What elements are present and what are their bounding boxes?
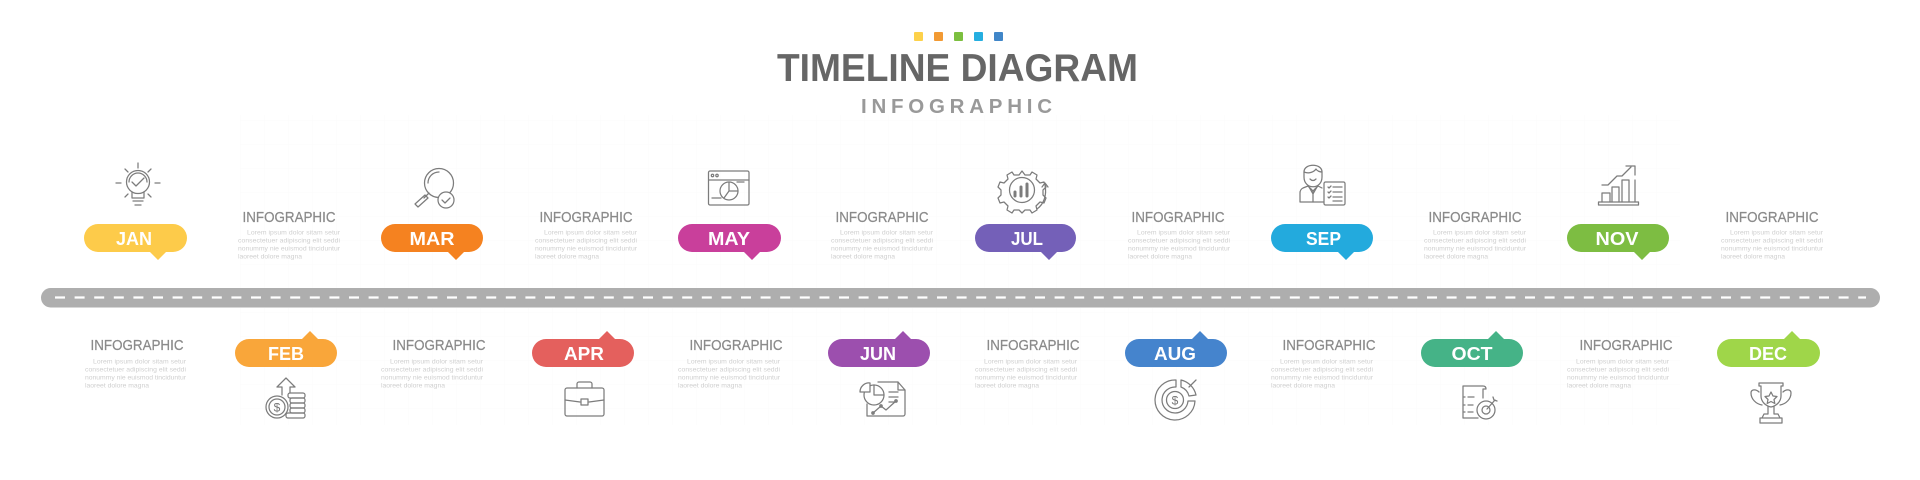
text block: Nov description: INFOGRAPHIC	[1726, 209, 1819, 226]
text block: Dec description: INFOGRAPHIC	[1580, 337, 1673, 354]
text block: Jul description: laoreet dolore magna	[1128, 254, 1192, 260]
SEP block	[1271, 165, 1527, 260]
text block: Oct description	[1271, 337, 1376, 390]
icon: businessman with checklist	[1300, 165, 1345, 205]
month pill: SEP	[1271, 224, 1373, 260]
month pill: OCT: OCT	[1452, 344, 1492, 364]
text block: Nov description: laoreet dolore magna	[1721, 254, 1785, 260]
JAN block	[84, 163, 341, 260]
text block: Dec description: nonummy nie euismod tinciduntur	[1567, 374, 1670, 382]
month pill: AUG: AUG	[1154, 344, 1196, 364]
text block: Mar description: nonummy nie euismod tinciduntur	[535, 246, 638, 252]
text block: Dec description: Lorem ipsum dolor sitam setur	[1576, 358, 1670, 366]
month pill: NOV: NOV	[1596, 229, 1638, 249]
MAY block	[678, 171, 934, 260]
text block: Sep description: Lorem ipsum dolor sitam setur	[1433, 230, 1527, 236]
text block: Mar description: consectetuer adipiscing elit seddi	[535, 238, 637, 244]
month pill: JUL: JUL	[1011, 229, 1043, 249]
month pill: MAR	[381, 224, 483, 260]
text block: Apr description	[381, 337, 486, 390]
text block: Oct description: INFOGRAPHIC	[1282, 337, 1376, 354]
text block: May description	[831, 209, 934, 260]
month pill: OCT	[1421, 331, 1523, 367]
text block: Oct description: consectetuer adipiscing elit seddi	[1271, 366, 1373, 374]
month pill: APR	[532, 331, 634, 367]
text block: Mar description: INFOGRAPHIC	[540, 209, 633, 226]
month pill: DEC: DEC	[1749, 344, 1787, 364]
text block: Aug description: consectetuer adipiscing elit seddi	[975, 366, 1077, 374]
month pill: MAY: MAY	[708, 229, 750, 249]
text block: May description: INFOGRAPHIC	[836, 209, 929, 226]
title: TIMELINE DIAGRAM	[777, 47, 1138, 90]
icon: trophy	[1751, 383, 1791, 423]
icon: rising bar chart	[1598, 166, 1638, 205]
text block: Oct description: Lorem ipsum dolor sitam setur	[1280, 358, 1374, 366]
month pill: FEB	[235, 331, 337, 367]
icon: light bulb	[116, 163, 160, 205]
text block: May description: consectetuer adipiscing elit seddi	[831, 238, 933, 244]
text block: Jun description: Lorem ipsum dolor sitam setur	[687, 358, 781, 366]
text block: Dec description: consectetuer adipiscing elit seddi	[1567, 366, 1669, 374]
FEB block	[85, 331, 337, 418]
month pill: AUG	[1125, 331, 1227, 367]
icon: gear with bars	[998, 171, 1048, 213]
colour dots	[914, 32, 1003, 41]
icon: browser with pie chart	[708, 171, 749, 205]
text block: Jan description: INFOGRAPHIC	[242, 209, 336, 226]
icon: dollar donut target	[1155, 380, 1196, 420]
month pill: APR: APR	[564, 344, 604, 364]
text block: Jul description	[1128, 209, 1231, 260]
text block: Sep description: consectetuer adipiscing elit seddi	[1424, 238, 1526, 244]
month pill: NOV	[1567, 224, 1669, 260]
month pill: FEB: FEB	[268, 344, 304, 364]
icon: coins with arrow: $	[274, 400, 281, 414]
text block: Nov description: consectetuer adipiscing elit seddi	[1721, 238, 1823, 244]
text block: Aug description	[975, 337, 1080, 390]
text block: Apr description: INFOGRAPHIC	[392, 337, 486, 354]
month pill: DEC	[1717, 331, 1820, 367]
month pill: JUN: JUN	[860, 344, 896, 364]
text block: Feb description: consectetuer adipiscing elit seddi	[85, 366, 186, 374]
text block: Jul description: consectetuer adipiscing elit seddi	[1128, 238, 1230, 244]
text block: Feb description: INFOGRAPHIC	[90, 337, 184, 354]
text block: Sep description: INFOGRAPHIC	[1428, 209, 1522, 226]
icon: checklist with target	[1463, 386, 1497, 419]
month pill: JAN: JAN	[116, 229, 152, 249]
icon: briefcase	[565, 382, 604, 416]
text block: Feb description	[85, 337, 187, 390]
subtitle: INFOGRAPHIC	[861, 95, 1052, 118]
text block: Jun description: INFOGRAPHIC	[690, 337, 783, 354]
text block: Jun description: nonummy nie euismod tinciduntur	[678, 374, 781, 382]
text block: Dec description: laoreet dolore magna	[1567, 382, 1631, 390]
text block: Nov description: nonummy nie euismod tinciduntur	[1721, 246, 1824, 252]
MAR block	[381, 168, 638, 260]
text block: Apr description: laoreet dolore magna	[381, 382, 445, 390]
text block: Jun description: laoreet dolore magna	[678, 382, 742, 390]
icon: report with pie chart	[860, 382, 905, 416]
text block: May description: laoreet dolore magna	[831, 254, 895, 260]
text block: Jan description	[238, 209, 341, 260]
month pill: MAR: MAR	[410, 229, 454, 249]
month pill: JAN	[84, 224, 187, 260]
text block: Mar description: laoreet dolore magna	[535, 254, 599, 260]
text block: Feb description: laoreet dolore magna	[85, 382, 149, 390]
text block: Jul description: INFOGRAPHIC	[1132, 209, 1225, 226]
month pill: SEP: SEP	[1306, 229, 1341, 249]
text block: Oct description: laoreet dolore magna	[1271, 382, 1335, 390]
APR block	[381, 331, 634, 416]
text block: Sep description	[1424, 209, 1527, 260]
text block: Nov description: Lorem ipsum dolor sitam setur	[1730, 230, 1824, 236]
text block: Apr description: nonummy nie euismod tinciduntur	[381, 374, 484, 382]
text block: May description: nonummy nie euismod tinciduntur	[831, 246, 934, 252]
text block: Dec description	[1567, 337, 1673, 390]
text block: Apr description: consectetuer adipiscing elit seddi	[381, 366, 483, 374]
text block: Jan description: laoreet dolore magna	[238, 254, 302, 260]
text block: Sep description: laoreet dolore magna	[1424, 254, 1488, 260]
month pill: JUL	[975, 224, 1076, 260]
AUG block	[975, 331, 1227, 420]
text block: Aug description: laoreet dolore magna	[975, 382, 1039, 390]
text block: May description: Lorem ipsum dolor sitam setur	[840, 230, 934, 236]
text block: Feb description: Lorem ipsum dolor sitam setur	[93, 358, 187, 366]
text block: Apr description: Lorem ipsum dolor sitam setur	[390, 358, 484, 366]
month pill: JUN	[828, 331, 930, 367]
timeline road	[41, 288, 1880, 308]
text block: Mar description	[535, 209, 638, 260]
icon: dollar donut target: $	[1172, 394, 1179, 408]
text block: Feb description: nonummy nie euismod tinciduntur	[85, 374, 187, 382]
text block: Sep description: nonummy nie euismod tinciduntur	[1424, 246, 1527, 252]
icon: magnifier with check	[415, 168, 454, 208]
text block: Aug description: nonummy nie euismod tinciduntur	[975, 374, 1078, 382]
text block: Jun description	[678, 337, 783, 390]
text block: Jun description: consectetuer adipiscing elit seddi	[678, 366, 780, 374]
month pill: MAY	[678, 224, 781, 260]
OCT block	[1271, 331, 1523, 419]
NOV block	[1567, 166, 1824, 260]
text block: Nov description	[1721, 209, 1824, 260]
JUL block	[975, 171, 1231, 260]
text block: Jan description: Lorem ipsum dolor sitam setur	[247, 230, 341, 236]
text block: Aug description: Lorem ipsum dolor sitam setur	[984, 358, 1078, 366]
text block: Jul description: Lorem ipsum dolor sitam setur	[1137, 230, 1231, 236]
text block: Oct description: nonummy nie euismod tinciduntur	[1271, 374, 1374, 382]
text block: Jan description: nonummy nie euismod tinciduntur	[238, 246, 341, 252]
text block: Jan description: consectetuer adipiscing elit seddi	[238, 238, 340, 244]
text block: Jul description: nonummy nie euismod tinciduntur	[1128, 246, 1231, 252]
DEC block	[1567, 331, 1820, 423]
text block: Aug description: INFOGRAPHIC	[986, 337, 1080, 354]
text block: Mar description: Lorem ipsum dolor sitam setur	[544, 230, 638, 236]
JUN block	[678, 331, 930, 416]
icon: coins with arrow	[266, 378, 305, 418]
